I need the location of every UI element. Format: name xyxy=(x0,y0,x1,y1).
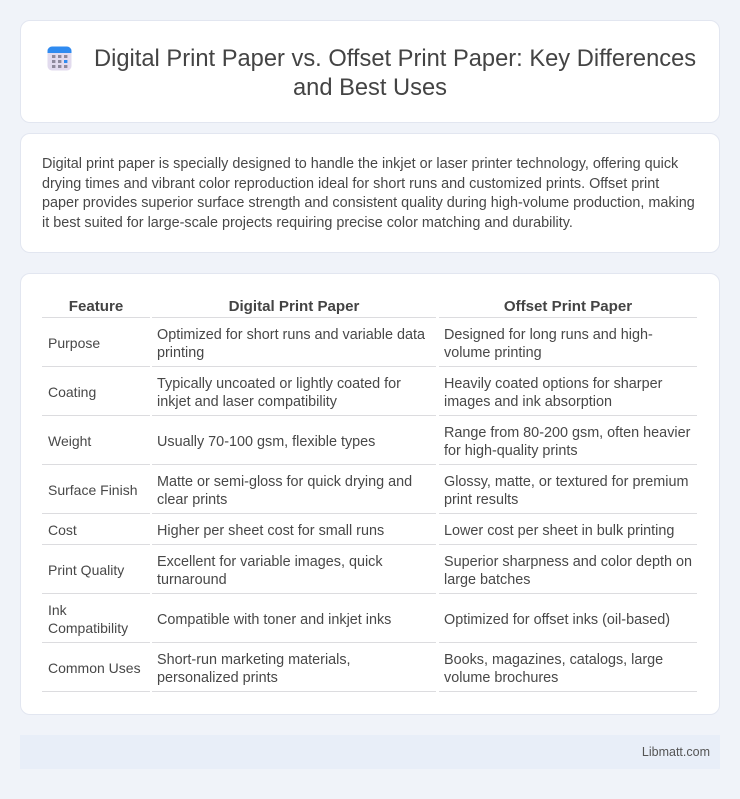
row: coating xyxy=(48,376,662,410)
header panel xyxy=(20,20,720,123)
row: weight xyxy=(48,425,690,459)
footer bar xyxy=(20,735,720,769)
row: common uses: Books, magazines, catalogs, large xyxy=(444,652,663,668)
row: purpose: Purpose xyxy=(48,335,100,351)
row: cost: Higher per sheet cost for small runs xyxy=(157,523,384,539)
row: purpose: printing xyxy=(157,345,204,361)
row: print quality: turnaround xyxy=(157,572,227,588)
row: ink compatibility xyxy=(48,602,670,636)
title: Digital Print Paper vs. Offset Print Paper: Key Differences xyxy=(94,46,696,72)
row: common uses xyxy=(48,652,663,686)
row: weight: Weight xyxy=(48,433,91,449)
row: print quality: Superior sharpness and color depth on xyxy=(444,554,692,570)
intro paragraph: drying times and vibrant color reproduction ideal for short runs and customized prints. Offset print xyxy=(42,176,659,192)
intro text panel xyxy=(20,133,720,253)
row: purpose: Optimized for short runs and variable data xyxy=(157,327,425,343)
row: coating: Heavily coated options for sharper xyxy=(444,376,662,392)
row: weight: Usually 70-100 gsm, flexible types xyxy=(157,434,375,450)
row: weight: Range from 80-200 gsm, often heavier xyxy=(444,425,690,441)
row: weight: for high-quality prints xyxy=(444,443,578,459)
row: ink compatibility: Compatibility xyxy=(48,620,128,636)
title xyxy=(94,46,696,101)
row: cost: Lower cost per sheet in bulk printing xyxy=(444,523,674,539)
row: surface finish: Surface Finish xyxy=(48,482,137,498)
intro paragraph: paper provides superior surface strength and consistent quality during high-volume production, making xyxy=(42,195,695,211)
row: purpose: Designed for long runs and high- xyxy=(444,327,653,343)
table header: offset print paper: Offset Print Paper xyxy=(504,298,632,315)
row: common uses: Common Uses xyxy=(48,660,141,676)
intro paragraph: Digital print paper is specially designed to handle the inkjet or laser printer technology, offering quick xyxy=(42,156,678,172)
row: print quality xyxy=(48,554,692,588)
row: print quality: large batches xyxy=(444,572,530,588)
comparison table xyxy=(42,298,697,692)
row: ink compatibility: Ink xyxy=(48,602,67,618)
row: coating: inkjet and laser compatibility xyxy=(157,394,337,410)
row: surface finish: Matte or semi-gloss for quick drying and xyxy=(157,474,412,490)
row: common uses: personalized prints xyxy=(157,670,278,686)
row: print quality: Excellent for variable images, quick xyxy=(157,554,383,570)
icon: calendar xyxy=(48,46,72,70)
footer credit: Libmatt.com xyxy=(642,745,710,759)
row: surface finish: Glossy, matte, or textured for premium xyxy=(444,474,688,490)
row: ink compatibility: Compatible with toner and inkjet inks xyxy=(157,612,391,628)
row: surface finish: print results xyxy=(444,492,518,508)
row: cost: Cost xyxy=(48,522,77,538)
title: and Best Uses xyxy=(293,75,447,101)
row: coating: images and ink absorption xyxy=(444,394,612,410)
row: cost xyxy=(48,522,674,539)
comparison table panel xyxy=(20,273,720,715)
row: purpose xyxy=(48,327,653,361)
table header: feature: Feature xyxy=(69,298,123,315)
intro paragraph xyxy=(42,156,695,231)
row: surface finish xyxy=(48,474,688,508)
row: ink compatibility: Optimized for offset inks (oil-based) xyxy=(444,612,670,628)
row: coating: Typically uncoated or lightly coated for xyxy=(157,376,401,392)
row: surface finish: clear prints xyxy=(157,492,227,508)
row: coating: Coating xyxy=(48,384,96,400)
row: print quality: Print Quality xyxy=(48,562,124,578)
row: common uses: Short-run marketing materials, xyxy=(157,652,351,668)
intro paragraph: it best suited for large-scale projects requiring precise color matching and durability. xyxy=(42,215,573,231)
row: purpose: volume printing xyxy=(444,345,542,361)
table header: digital print paper: Digital Print Paper xyxy=(229,298,359,315)
row: common uses: volume brochures xyxy=(444,670,558,686)
